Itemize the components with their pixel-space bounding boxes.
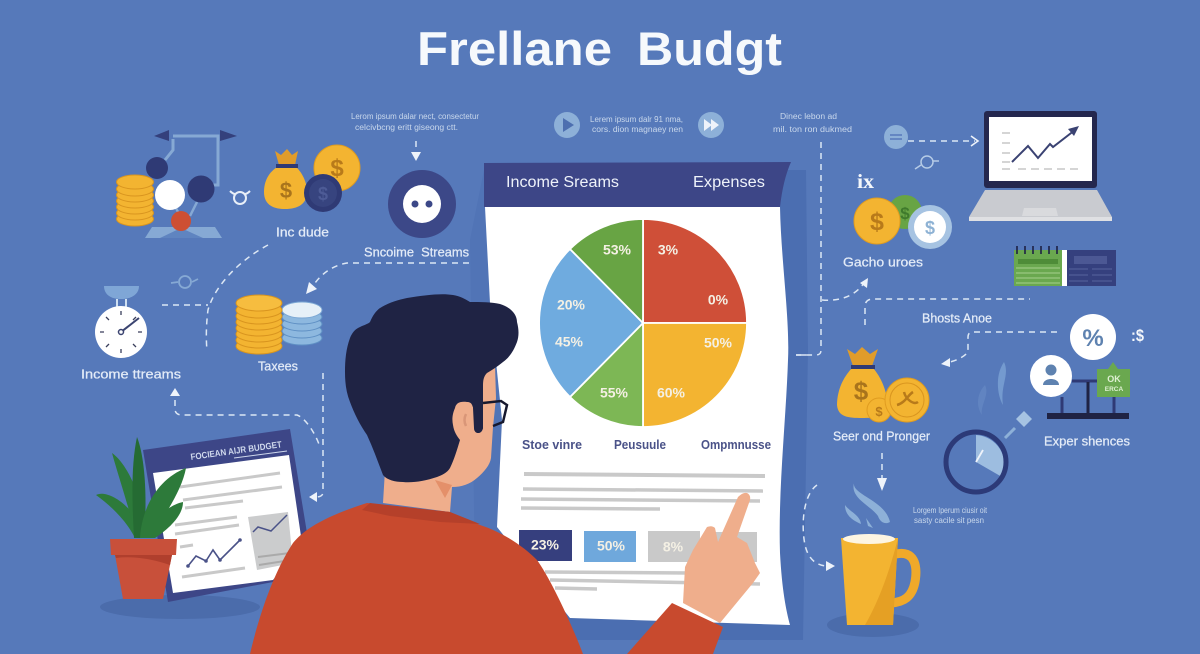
panel: freelance budget document: [143, 429, 307, 602]
label: Bhosts Anoe: Bhosts Anoe: [922, 311, 992, 325]
icon: money bag and coins: $: [318, 184, 328, 204]
glasses: [483, 401, 507, 426]
document title: FOCIEAN AIJR BUDGET: [190, 439, 283, 462]
panel: budget sheet: [470, 162, 808, 640]
label: Gacho uroes: Gacho uroes: [843, 255, 923, 269]
icon: gray bubble: [884, 125, 908, 149]
icon: three coins: [854, 195, 952, 249]
shirt: [250, 503, 583, 654]
small text: center note: cors. dion magnaey nen: [592, 125, 683, 134]
small text: right note: Dinec lebon ad: [780, 112, 837, 121]
text lines: [521, 474, 765, 589]
pie chart: 60%: [657, 385, 686, 401]
document line chart: [186, 538, 242, 568]
pie legend labels: [522, 437, 771, 452]
arrow: down to circle icon: [411, 141, 421, 161]
pie chart: [539, 219, 747, 427]
small text: center note: Lerem ipsum dalr 91 nma,: [590, 115, 683, 124]
ear: [454, 402, 476, 438]
icon: small symbol left: [171, 276, 198, 288]
stat boxes: 8%: [663, 539, 684, 555]
icon: dark circle with dots: [388, 170, 456, 238]
icon: scale and coin molecule: [116, 130, 237, 238]
icon: play button: [554, 112, 580, 138]
arrow: connector to notebook row: [865, 299, 1030, 325]
icon: balance with person and sign: ERCA: [1105, 386, 1124, 393]
header band: [484, 162, 791, 207]
neck and face: [383, 365, 496, 512]
arrow: connector main vertical: [796, 142, 868, 355]
pie chart: 55%: [600, 385, 629, 401]
icon: money bag with coins: $: [875, 404, 883, 419]
small text: top left note: celcivbcng eritt giseong ctt.: [355, 123, 458, 132]
arrow: vertical to document: [309, 373, 323, 502]
icon: notebook: [1014, 246, 1116, 286]
sleeve: [627, 603, 723, 654]
label: Inc dude: Inc dude: [276, 225, 329, 239]
icon: percent bubble: [1070, 314, 1116, 360]
label: Sncoime Streams: Sncoime Streams: [364, 245, 469, 259]
icon: stopwatch: [95, 286, 147, 358]
pie legend labels: Ompmnusse: [701, 437, 771, 452]
small text: center note: [590, 115, 683, 134]
stat boxes: 50%: [597, 538, 626, 554]
decorative tick on sheet side: [796, 354, 806, 356]
small text: mug note: [913, 506, 988, 525]
small text: right note: mil. ton ron dukmed: [773, 125, 852, 134]
pointing hand: [683, 493, 760, 623]
label: Exper shences: Exper shences: [1044, 434, 1130, 448]
pie chart: 0%: [708, 292, 729, 308]
icon: money bag with coins: [837, 347, 929, 422]
pie legend labels: Peusuule: [614, 437, 666, 452]
small text: mug note: sasty cacile sit pesn: [914, 516, 984, 525]
icon: timer with magnifier: [946, 362, 1032, 492]
icon: money bag and coins: [264, 145, 360, 212]
icon: three coins: $: [870, 208, 884, 236]
arrow: percent to bag: [941, 332, 1057, 367]
small text: right note: [773, 112, 852, 134]
small text: mug note: Lorgem Iperum ciusir oit: [913, 506, 988, 515]
arrow: curve to mug: [803, 485, 835, 571]
pie chart: 3%: [658, 242, 679, 258]
person: head and shirt: [250, 294, 760, 654]
icon: laptop with chart: [969, 111, 1112, 221]
document gray chart: [248, 512, 293, 570]
pie chart: 50%: [704, 335, 733, 351]
label: Taxees: Taxees: [258, 359, 298, 373]
redraw sideburn over ear: [473, 400, 483, 433]
arrow: streams to taxes: [306, 253, 482, 294]
arrow: to laptop: [908, 136, 978, 146]
icon: three coins: $: [900, 204, 910, 223]
icon: taxes coin stacks: [236, 295, 322, 354]
icon: money bag with coins: $: [854, 376, 869, 406]
icon: money bag and coins: $: [330, 155, 344, 182]
arrow: down to mug: [877, 453, 887, 491]
header band: Income Sreams: [506, 174, 619, 191]
pie chart: 45%: [555, 334, 584, 350]
icon: fast forward button: [698, 112, 724, 138]
icon: small symbol right: [915, 156, 939, 169]
icon: plant and document shadow: [100, 595, 260, 619]
icon: percent bubble: %: [1082, 325, 1104, 352]
header band: Expenses: [693, 174, 765, 191]
pie legend labels: Stoe vinre: [522, 437, 582, 452]
arrow: document to income: [170, 388, 320, 447]
pie chart: 20%: [557, 297, 586, 313]
title: Frellane: [417, 22, 612, 75]
icon: money bag and coins: $: [280, 178, 292, 203]
icon: three coins: $: [925, 218, 935, 238]
hair: [345, 294, 518, 482]
icon: steaming mug: [827, 483, 919, 637]
icon: balance with person and sign: [1030, 355, 1130, 419]
arrow: dashed curve from Inc dude: [162, 245, 268, 351]
label: ix: ix: [857, 171, 874, 193]
label: Seer ond Pronger: Seer ond Pronger: [833, 429, 930, 443]
stat boxes: [519, 530, 757, 562]
title: Budgt: [637, 22, 782, 75]
label: dollar: :$: [1131, 326, 1144, 345]
title: [417, 22, 782, 75]
small text: top left note: [351, 112, 479, 132]
pie chart: 53%: [603, 242, 632, 258]
icon: small symbol: [230, 191, 250, 204]
document text lines: [175, 473, 282, 577]
icon: balance with person and sign: OK: [1107, 374, 1121, 384]
label: Income ttreams: Income ttreams: [81, 367, 181, 381]
small text: top left note: Lerom ipsum dalar nect, consectetur: [351, 112, 479, 121]
icon: potted plant: [96, 437, 186, 599]
stat boxes: 23%: [531, 537, 560, 553]
